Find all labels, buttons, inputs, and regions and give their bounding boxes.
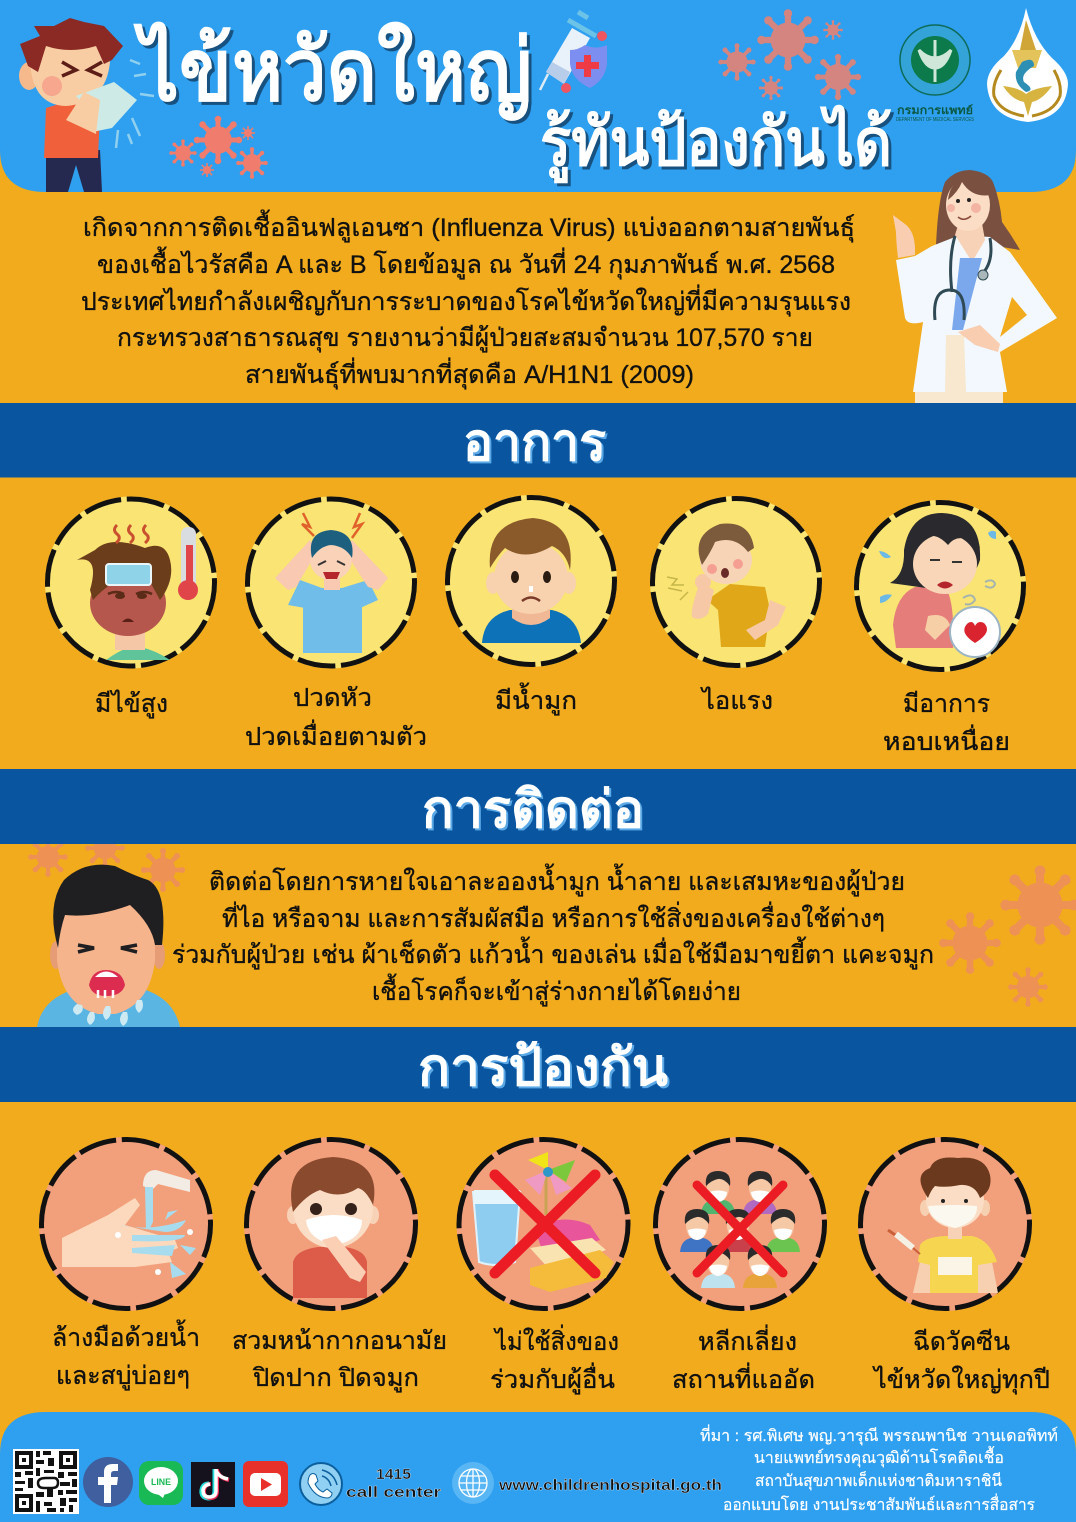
icon: line: LINE	[151, 1477, 171, 1487]
label: wash hands: และสบู่บ่อยๆ	[56, 1362, 190, 1391]
symptom: shortness of breath	[852, 498, 1028, 674]
heading: symptoms: อาการ	[463, 414, 606, 472]
intro text: ของเชื้อไวรัสคือ A และ B โดยข้อมูล ณ วันที่ 24 กุมภาพันธ์ พ.ศ. 2568	[97, 246, 835, 280]
icon: syringe and shield	[540, 12, 607, 93]
label: call center: 1415	[376, 1466, 411, 1483]
label: high fever: มีไข้สูง	[95, 689, 168, 719]
label: shortness of breath	[883, 690, 1010, 756]
prevention: vaccine	[856, 1135, 1034, 1313]
icon: phone	[300, 1463, 342, 1505]
logo: ministry of public health: DEPARTMENT OF MEDICAL SERVICES	[896, 117, 975, 123]
icon: doctor	[893, 170, 1057, 403]
label: vaccine: ไข้หวัดใหญ่ทุกปี	[872, 1365, 1050, 1395]
label: call center: call center	[346, 1484, 441, 1501]
source credits: นายแพทย์ทรงคุณวุฒิด้านโรคติดเชื้อ	[754, 1446, 1004, 1468]
footer band	[0, 1412, 1076, 1522]
heading: prevention: การป้องกัน	[418, 1039, 668, 1097]
prevention: wash hands	[37, 1135, 215, 1313]
label: wear mask	[232, 1327, 447, 1393]
transmission text: ติดต่อโดยการหายใจเอาละอองน้ำมูก น้ำลาย และเสมหะของผู้ป่วย	[209, 863, 905, 897]
label: shortness of breath: หอบเหนื่อย	[883, 724, 1010, 756]
icon: globe	[452, 1462, 494, 1504]
QR code	[13, 1449, 79, 1514]
transmission text: เชื้อโรคก็จะเข้าสู่ร่างกายได้โดยง่าย	[372, 973, 741, 1007]
source credits: ที่มา : รศ.พิเศษ พญ.วารุณี พรรณพานิช วานเดอพิทท์	[700, 1424, 1058, 1446]
label: avoid crowds: สถานที่แออัด	[672, 1362, 815, 1394]
transmission text: ที่ไอ หรือจาม และการสัมผัสมือ หรือการใช้สิ่งของเครื่องใช้ต่างๆ	[222, 901, 885, 933]
symptom: runny nose	[443, 493, 619, 669]
transmission text: ร่วมกับผู้ป่วย เช่น ผ้าเช็ดตัว แก้วน้ำ ของเล่น เมื่อใช้มือมาขยี้ตา แคะจมูก	[172, 936, 934, 970]
source credits: ออกแบบโดย งานประชาสัมพันธ์และการสื่อสาร	[723, 1493, 1035, 1514]
icon: line	[139, 1461, 183, 1505]
label: runny nose: มีน้ำมูก	[495, 682, 577, 716]
logo: ministry of public health	[896, 25, 975, 123]
label: wear mask: สวมหน้ากากอนามัย	[232, 1327, 447, 1355]
label: do not share items: ร่วมกับผู้อื่น	[490, 1362, 615, 1395]
label: shortness of breath: มีอาการ	[903, 690, 990, 718]
label: headache and body aches: ปวดหัว	[293, 684, 372, 712]
title: ไข้หวัดใหญ่	[133, 21, 532, 122]
header band	[0, 0, 1076, 192]
icon: facebook	[83, 1457, 133, 1507]
label: cough: ไอแรง	[700, 686, 773, 715]
intro text: กระทรวงสาธารณสุข รายงานว่ามีผู้ป่วยสะสมจำนวน 107,570 ราย	[117, 324, 813, 353]
icon: person sneezing	[37, 865, 180, 1027]
source credits	[700, 1424, 1058, 1514]
icon: youtube	[243, 1461, 288, 1507]
symptom: cough	[648, 494, 824, 670]
label: headache and body aches	[245, 684, 427, 751]
prevention: avoid crowds	[651, 1135, 829, 1313]
band: prevention	[0, 1027, 1076, 1102]
prevention: wear mask	[242, 1135, 420, 1313]
symptom: high fever	[43, 495, 219, 670]
intro text	[81, 209, 855, 390]
label: avoid crowds: หลีกเลี่ยง	[698, 1324, 797, 1356]
prevention: do not share items	[455, 1135, 632, 1313]
intro text: ประเทศไทยกำลังเผชิญกับการระบาดของโรคไข้หวัดใหญ่ที่มีความรุนแรง	[81, 284, 851, 317]
label: vaccine: ฉีดวัคซีน	[913, 1328, 1010, 1356]
intro text: เกิดจากการติดเชื้ออินฟลูเอนซา (Influenza Virus) แบ่งออกตามสายพันธุ์	[83, 209, 855, 243]
band: symptoms	[0, 403, 1076, 478]
label: wash hands: ล้างมือด้วยน้ำ	[52, 1319, 200, 1352]
label: avoid crowds	[672, 1324, 815, 1394]
icon: tiktok	[191, 1462, 235, 1507]
logo: ministry of public health: กรมการแพทย์	[897, 104, 973, 117]
label: do not share items: ไม่ใช้สิ่งของ	[493, 1324, 619, 1356]
subtitle: รู้ทันป้องกันได้	[540, 104, 892, 184]
viruses: transmission	[28, 828, 1076, 1007]
symptom: headache	[243, 495, 419, 670]
label: call center	[346, 1466, 441, 1501]
viruses: header left	[169, 116, 268, 179]
label: do not share items	[490, 1324, 619, 1395]
intro text: สายพันธุ์ที่พบมากที่สุดคือ A/H1N1 (2009)	[245, 357, 694, 390]
label: headache and body aches: ปวดเมื่อยตามตัว	[245, 719, 427, 751]
source credits: สถาบันสุขภาพเด็กแห่งชาติมหาราชินี	[755, 1470, 1002, 1491]
viruses: header right	[718, 9, 861, 100]
label: vaccine	[872, 1328, 1050, 1395]
band: transmission	[0, 769, 1076, 844]
heading: transmission: การติดต่อ	[422, 781, 644, 839]
label: wash hands	[52, 1319, 200, 1391]
icon: sneezing boy	[19, 18, 154, 192]
transmission text	[172, 863, 934, 1007]
label: wear mask: ปิดปาก ปิดจมูก	[252, 1364, 419, 1393]
logo: children's hospital drop	[987, 8, 1068, 122]
label: website: www.childrenhospital.go.th	[498, 1477, 722, 1494]
